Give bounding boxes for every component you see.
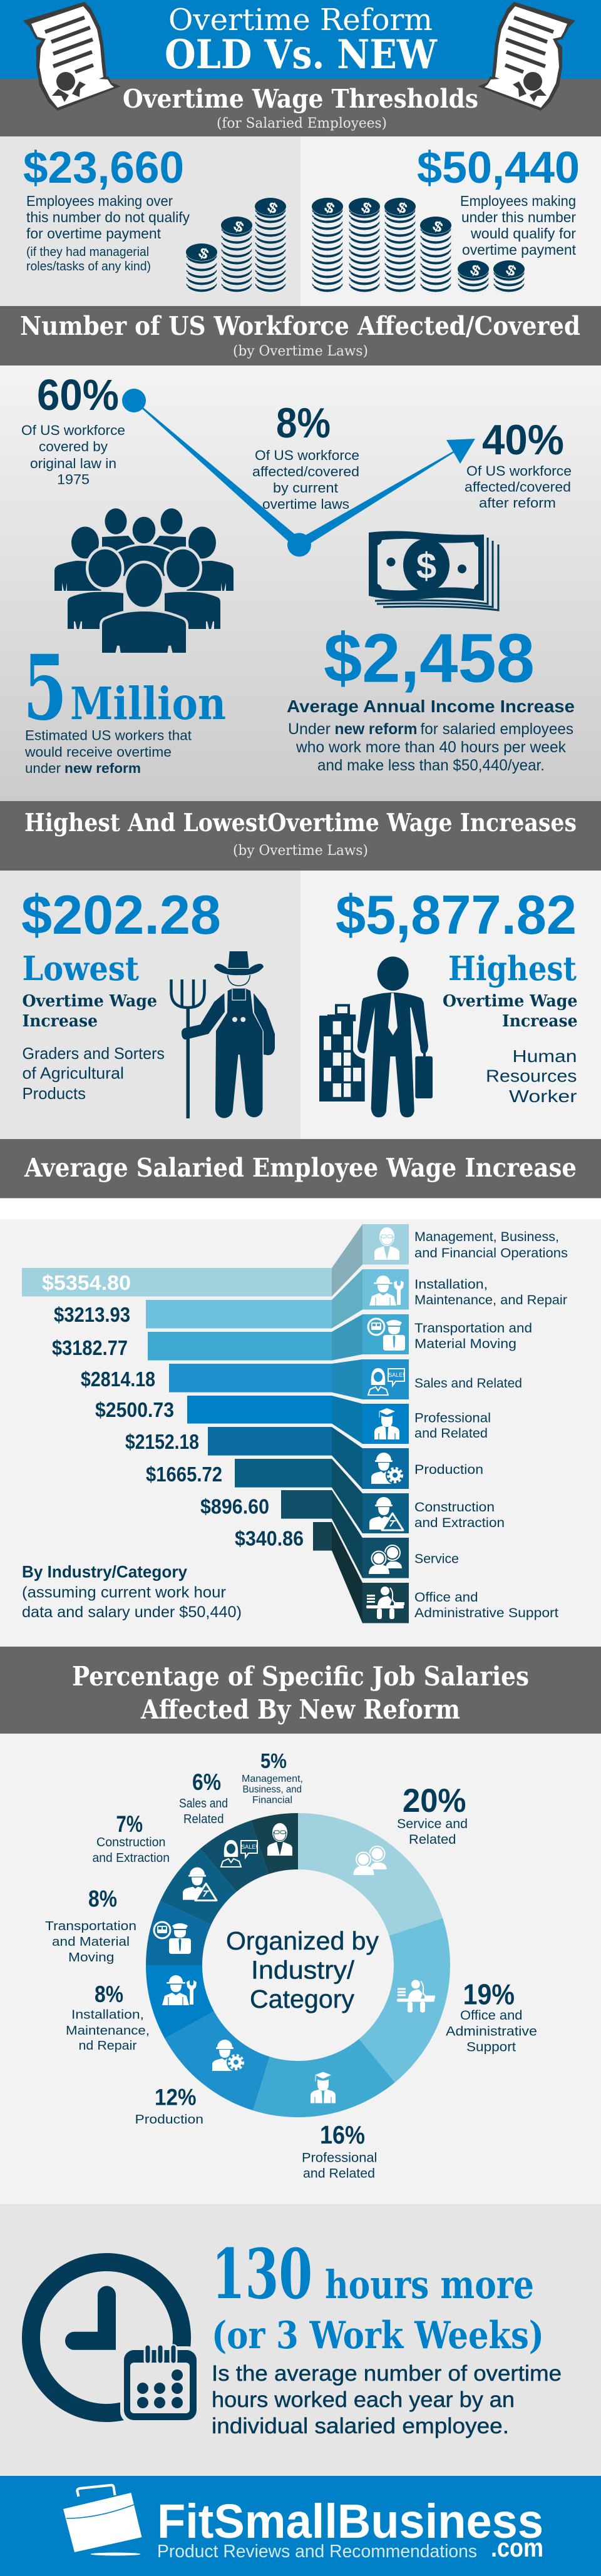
segment: production 12 percent	[165, 2011, 270, 2110]
old threshold description: for overtime payment	[26, 225, 162, 242]
tile: management	[362, 1224, 568, 1264]
segment: professional 16 percent	[253, 2039, 395, 2117]
highest text: Overtime Wage	[443, 992, 577, 1011]
stat: 60 percent: original law in	[30, 456, 116, 471]
highest text: Resources	[486, 1066, 577, 1086]
tile: installation: Installation,	[414, 1277, 488, 1292]
icon: professional	[311, 2072, 336, 2103]
description: individual salaried employee.	[212, 2414, 509, 2438]
label: office 19 percent: 19%	[463, 1978, 515, 2010]
logo domain: .com	[491, 2533, 543, 2562]
segment: sales 6 percent	[200, 1821, 269, 1892]
stat: average annual income increase: $2,458	[324, 620, 535, 697]
label: production 12 percent: Production	[135, 2113, 203, 2127]
label: installation 8 percent: nd Repair	[79, 2039, 137, 2053]
new threshold amount: $50,440	[417, 143, 580, 193]
stat: 5 million: Estimated US workers that	[25, 727, 192, 744]
bar: sales: $2814.18	[81, 1367, 155, 1391]
icon: coin stacks new: $	[394, 199, 409, 217]
stat: 40 percent: affected/covered	[465, 479, 571, 494]
old threshold description: (if they had managerial	[26, 245, 149, 259]
label: professional 16 percent: 16%	[320, 2120, 365, 2149]
icon: coin stacks old: $	[196, 245, 211, 263]
heading: percentage of specific job salaries	[0, 1647, 601, 1734]
old threshold description: this number do not qualify	[26, 209, 190, 225]
bar: professional: $2500.73	[95, 1398, 174, 1421]
panel: highest increase	[300, 871, 601, 1139]
note: by industry: By Industry/Category	[22, 1562, 187, 1581]
segment: installation 8 percent	[146, 1965, 214, 2038]
heading: workforce affected: (by Overtime Laws)	[233, 344, 368, 359]
bar: professional	[95, 1396, 332, 1424]
tile: professional	[362, 1404, 491, 1444]
icon: coin stacks new: $	[468, 262, 483, 280]
stat: 8 percent: overtime laws	[262, 496, 349, 512]
label: service 20 percent: Service and	[397, 1817, 468, 1831]
stat: 5 million: Million	[70, 677, 226, 730]
tile: construction: and Extraction	[414, 1516, 505, 1530]
label: installation 8 percent: 8%	[95, 1981, 123, 2007]
donut center label: Industry/	[251, 1955, 355, 1984]
label: transportation 8 percent: Moving	[68, 1951, 114, 1965]
heading: overtime wage thresholds: (for Salaried Employees)	[217, 116, 387, 131]
icon: coin stacks new: $	[322, 199, 337, 217]
icon: coin stacks old: $	[231, 218, 246, 236]
old threshold amount: $23,660	[23, 143, 184, 193]
icon: construction	[183, 1868, 217, 1901]
stat: 8 percent: Of US workforce	[255, 447, 359, 463]
highest text: Human	[512, 1046, 577, 1066]
bar chart: wage increase by category	[22, 1224, 568, 1623]
stat: 8 percent: affected/covered	[252, 464, 359, 479]
donut center label: Organized by	[226, 1926, 379, 1955]
label: management 5 percent	[242, 1749, 303, 1806]
description	[212, 2361, 562, 2438]
new threshold description: Employees making	[460, 193, 576, 209]
icon: crowd of people	[54, 508, 234, 654]
bar: installation	[54, 1300, 332, 1328]
panel: old threshold	[0, 136, 300, 306]
panel: new threshold	[300, 136, 601, 306]
tile: office: Office and	[414, 1590, 478, 1605]
tile: construction	[362, 1493, 505, 1533]
lowest text: Increase	[23, 1012, 98, 1031]
label: management 5 percent: Financial	[252, 1795, 292, 1806]
stat: average annual income increase	[287, 620, 575, 774]
icon: installation	[162, 1975, 197, 2005]
icon: service	[353, 1846, 387, 1875]
donut center label	[226, 1926, 379, 2013]
icon: office	[397, 1980, 435, 2013]
lowest text: Overtime Wage	[23, 992, 157, 1011]
bar: transportation: $3182.77	[52, 1336, 128, 1359]
bar: management	[22, 1268, 332, 1297]
stat: 60 percent: 1975	[57, 472, 90, 487]
heading: overtime wage thresholds: Overtime Wage Thresholds	[123, 84, 478, 114]
icon: stack of bills: $	[416, 546, 436, 586]
icon: stack of bills	[369, 531, 498, 610]
old threshold description: Employees making over	[26, 193, 173, 209]
segment: transportation 8 percent	[146, 1901, 211, 1965]
label: sales 6 percent: Related	[183, 1812, 224, 1826]
stat: 60 percent	[21, 371, 125, 487]
bar: construction: $1665.72	[146, 1463, 222, 1486]
label: sales 6 percent	[179, 1769, 228, 1826]
label: management 5 percent: Management,	[242, 1774, 303, 1784]
icon: right certificate scroll	[478, 2, 575, 111]
label: construction 7 percent: Construction	[96, 1836, 165, 1849]
stat: 40 percent: Of US workforce	[466, 463, 572, 479]
icon: coin stacks old	[186, 198, 286, 294]
highest text	[336, 884, 577, 1106]
label: management 5 percent: Business, and	[243, 1784, 302, 1795]
lowest text: Lowest	[23, 949, 139, 988]
heading: workforce affected	[0, 306, 601, 365]
label: installation 8 percent: Installation,	[71, 2008, 144, 2021]
new threshold description: overtime payment	[462, 242, 577, 258]
highest text: $5,877.82	[336, 884, 577, 946]
heading: highest and lowest: (by Overtime Laws)	[233, 843, 368, 859]
tile: installation	[362, 1269, 567, 1309]
icon: sales	[221, 1840, 257, 1867]
tile: production	[362, 1448, 483, 1489]
label: transportation 8 percent	[45, 1886, 136, 1965]
stat: 130 hours more: hours more	[325, 2262, 534, 2308]
lowest text: Graders and Sorters	[23, 1044, 165, 1063]
stat: 5 million: under	[25, 760, 61, 776]
connectors	[332, 1224, 362, 1623]
donut center label: Category	[250, 1985, 354, 2013]
stat: average annual income increase: new reform	[334, 720, 417, 738]
tagline: Product Reviews and Recommendations	[157, 2542, 477, 2562]
label: sales 6 percent: 6%	[192, 1769, 221, 1795]
label: construction 7 percent	[93, 1811, 170, 1865]
highest text: Increase	[502, 1012, 577, 1031]
new threshold description: under this number	[461, 209, 576, 225]
new threshold description	[460, 193, 577, 258]
label: production 12 percent: 12%	[155, 2085, 197, 2110]
stat: 5 million: 5	[23, 635, 67, 740]
stat: 5 million: would receive overtime	[24, 744, 172, 760]
stat: average annual income increase: and make less than $50,440/year.	[317, 757, 545, 774]
white gap	[0, 1198, 601, 1219]
icon: coin stacks new: $	[503, 262, 518, 280]
bar: office	[235, 1522, 332, 1551]
label: construction 7 percent: and Extraction	[93, 1851, 170, 1865]
note: by industry: (assuming current work hour	[22, 1584, 226, 1602]
lowest text: of Agricultural	[23, 1064, 124, 1083]
label: transportation 8 percent: Transportation	[45, 1919, 136, 1933]
lowest text: Products	[23, 1084, 86, 1103]
tile: management: Management, Business,	[414, 1230, 559, 1244]
tile: office	[362, 1583, 558, 1623]
icon: building	[319, 1005, 365, 1101]
stat: 8 percent	[252, 399, 359, 512]
bar: sales	[81, 1364, 332, 1393]
panel: workforce coverage	[0, 365, 601, 801]
segment: office 19 percent	[359, 1918, 450, 2082]
label: installation 8 percent	[66, 1981, 150, 2053]
stat: 130 hours more: (or 3 Work Weeks)	[212, 2314, 544, 2358]
new threshold description: would qualify for	[470, 225, 576, 242]
tile: sales: SALE!	[388, 1372, 404, 1378]
stat: 40 percent: after reform	[479, 495, 556, 511]
icon: clock	[31, 2262, 182, 2413]
label: sales 6 percent: Sales and	[179, 1797, 228, 1811]
old threshold description	[26, 193, 190, 273]
label: service 20 percent: 20%	[403, 1782, 466, 1819]
stat: 8 percent: 8%	[276, 399, 331, 447]
note: by industry: data and salary under $50,440)	[22, 1603, 242, 1621]
tile: service	[362, 1538, 459, 1578]
label: production 12 percent	[135, 2085, 203, 2127]
tile: transportation: Transportation and	[414, 1321, 532, 1336]
icon: coin stacks new: $	[430, 218, 445, 236]
stat: average annual income increase: who work more than 40 hours per week	[295, 739, 566, 756]
donut chart: job salaries by category	[45, 1749, 537, 2181]
tile: sales: Sales and Related	[414, 1376, 522, 1391]
bar: construction	[146, 1459, 332, 1488]
stat: 40 percent: 40%	[482, 416, 564, 464]
lowest text: $202.28	[21, 884, 221, 946]
label: installation 8 percent: Maintenance,	[66, 2024, 150, 2038]
icon: calendar	[120, 2346, 200, 2424]
stat: average annual income increase: for salaried employees	[421, 720, 573, 738]
bar: production: $2152.18	[125, 1430, 199, 1453]
heading: percentage of specific job salaries: Affected By New Reform	[140, 1694, 460, 1725]
bar: production	[125, 1427, 332, 1456]
label: professional 16 percent: and Related	[303, 2167, 375, 2181]
lowest text	[21, 884, 221, 1103]
label: professional 16 percent: Professional	[302, 2150, 377, 2165]
heading: overtime wage thresholds	[123, 84, 478, 131]
stat: 8 percent: by current	[273, 480, 338, 496]
label: office 19 percent: Administrative	[446, 2024, 537, 2038]
icon: farmer with pitchfork	[172, 951, 275, 1118]
tile: production: Production	[414, 1463, 483, 1477]
label: professional 16 percent	[302, 2120, 377, 2181]
stat: 60 percent: covered by	[39, 439, 108, 454]
stat: 40 percent	[465, 416, 572, 511]
stat: 60 percent: 60%	[37, 371, 119, 419]
label: management 5 percent: 5%	[260, 1749, 287, 1772]
tile: transportation	[362, 1314, 532, 1354]
tile: professional: Professional	[414, 1411, 491, 1426]
icon: coin stacks old: $	[265, 199, 280, 217]
icon: transportation	[154, 1922, 191, 1954]
bar: transportation	[52, 1332, 332, 1361]
label: office 19 percent	[446, 1978, 537, 2055]
bar: installation: $3213.93	[54, 1303, 130, 1326]
highest text: Highest	[448, 949, 577, 988]
icon: briefcase logo	[63, 2485, 141, 2556]
label: office 19 percent: Office and	[460, 2008, 522, 2023]
title	[165, 3, 438, 78]
heading: average salaried wage increase	[0, 1139, 601, 1198]
bar: service	[200, 1490, 332, 1519]
icon: coin stacks new: $	[359, 199, 374, 217]
tile: installation: Maintenance, and Repair	[414, 1293, 567, 1307]
stat: 130 hours more	[212, 2234, 544, 2358]
tile: management: and Financial Operations	[414, 1246, 568, 1260]
segment: service 20 percent	[298, 1813, 443, 1936]
line chart: coverage trend	[122, 389, 475, 557]
stat: average annual income increase: Average Annual Income Increase	[287, 697, 575, 716]
stat: 130 hours more: 130	[212, 2234, 312, 2314]
stat: 60 percent: Of US workforce	[21, 422, 125, 438]
old threshold description: roles/tasks of any kind)	[26, 260, 151, 273]
logo wordmark: FitSmallBusiness	[157, 2495, 543, 2548]
label: transportation 8 percent: and Material	[52, 1935, 130, 1949]
footer: brand band	[0, 2476, 601, 2576]
label: service 20 percent	[397, 1782, 468, 1847]
stat: 5 million: new reform	[64, 760, 141, 776]
stat: 5 million	[23, 635, 226, 776]
tile: construction: Construction	[414, 1500, 495, 1515]
title: OLD Vs. NEW	[165, 31, 438, 78]
icon: left certificate scroll	[23, 2, 121, 111]
label: service 20 percent: Related	[409, 1832, 456, 1847]
tile: professional: and Related	[414, 1426, 488, 1441]
header band	[0, 0, 601, 136]
tile: transportation: Material Moving	[414, 1337, 516, 1351]
label: construction 7 percent: 7%	[116, 1811, 143, 1837]
tile: sales	[362, 1359, 522, 1399]
segment: management 5 percent	[251, 1813, 298, 1874]
title: Overtime Reform	[168, 3, 433, 38]
bar: office: $340.86	[235, 1527, 304, 1550]
icon: management	[267, 1823, 292, 1856]
highest text: Worker	[509, 1086, 577, 1106]
label: office 19 percent: Support	[466, 2040, 516, 2055]
label: transportation 8 percent: 8%	[88, 1886, 117, 1911]
icon: production	[212, 2040, 245, 2072]
note: by industry	[22, 1562, 242, 1621]
stat: average annual income increase: Under	[288, 720, 331, 738]
heading: highest and lowest	[0, 801, 601, 871]
icon: businessman with briefcase	[357, 956, 433, 1117]
tile: service: Service	[414, 1552, 459, 1566]
icon: sales: SALE!	[241, 1844, 257, 1850]
panel: lowest increase	[0, 871, 300, 1139]
description: hours worked each year by an	[212, 2388, 515, 2412]
tile: office: Administrative Support	[414, 1606, 558, 1620]
segment: construction 7 percent	[160, 1849, 237, 1924]
bar: management: $5354.80	[42, 1271, 131, 1294]
panel: 130 hours more	[0, 2204, 601, 2476]
heading: percentage of specific job salaries: Percentage of Specific Job Salaries	[72, 1661, 529, 1692]
icon: coin stacks new	[312, 198, 525, 294]
bar: service: $896.60	[200, 1495, 269, 1518]
description: Is the average number of overtime	[212, 2361, 562, 2386]
